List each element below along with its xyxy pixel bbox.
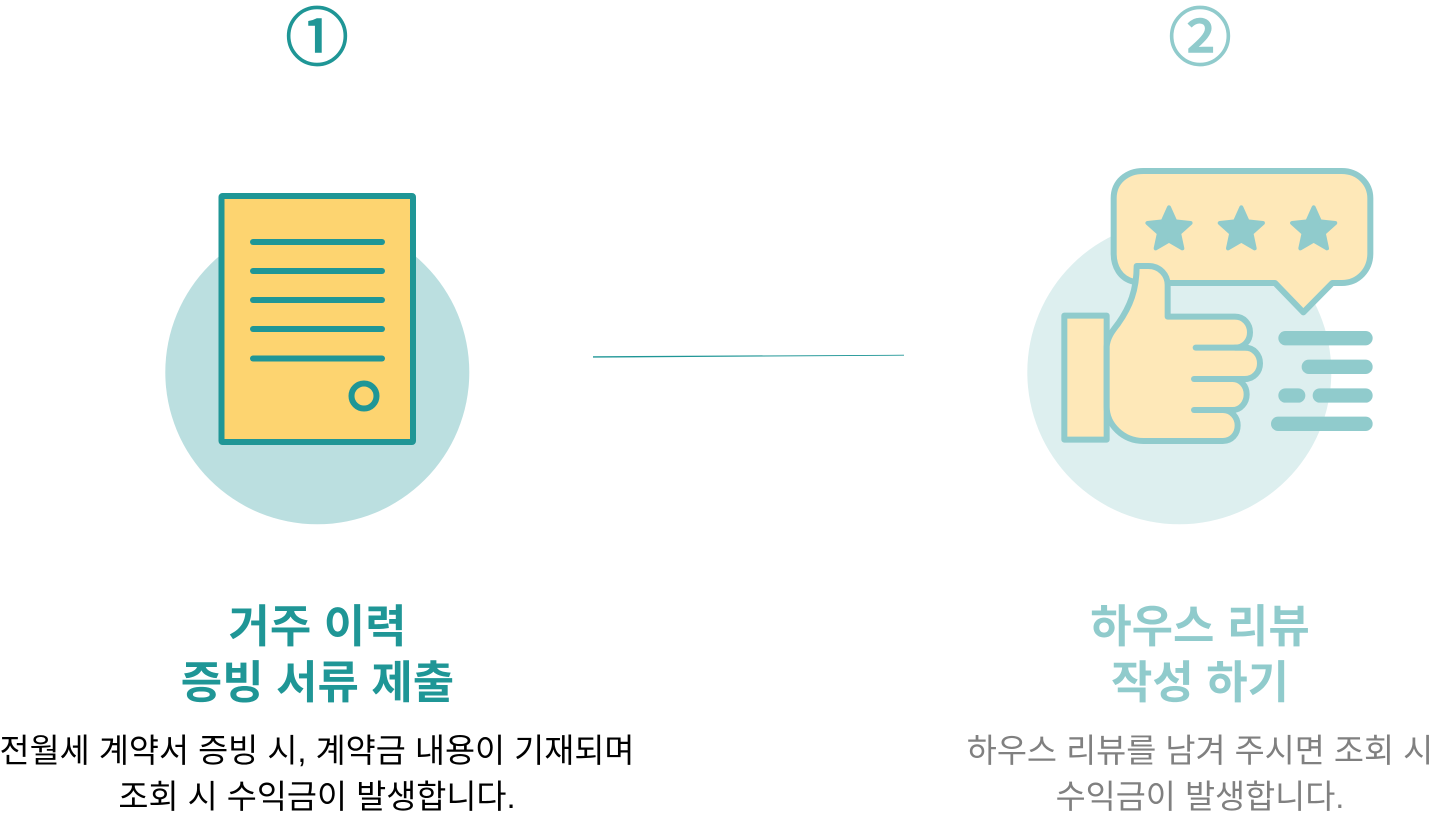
sleeve	[1064, 316, 1107, 440]
description: step 2: 하우스 리뷰를 남겨 주시면 조회 시	[967, 732, 1433, 768]
background circle: review	[1027, 220, 1331, 524]
heading: step 1: 거주 이력	[228, 601, 407, 652]
description: step 1: 조회 시 수익금이 발생합니다.	[118, 778, 516, 814]
hand	[1107, 266, 1260, 441]
heading: step 2: 하우스 리뷰	[1090, 601, 1310, 652]
heading: step 2	[1090, 601, 1310, 708]
connector line	[593, 355, 904, 358]
heading: step 2: 작성 하기	[1111, 657, 1289, 708]
description: step 2	[967, 732, 1433, 814]
description: step 1	[0, 732, 634, 814]
heading: step 1: 증빙 서류 제출	[181, 657, 454, 708]
stars	[1147, 207, 1335, 248]
description: step 1: 전월세 계약서 증빙 시, 계약금 내용이 기재되며	[0, 732, 634, 768]
step number 2: ②	[1168, 4, 1232, 74]
step number 1: ①	[286, 4, 348, 74]
rating bars	[1271, 331, 1373, 431]
icon: thumbs up review	[1064, 171, 1373, 441]
speech bubble	[1114, 171, 1370, 312]
description: step 2: 수익금이 발생합니다.	[1056, 778, 1344, 814]
finger lines	[1194, 348, 1247, 410]
icon: document	[222, 196, 413, 442]
background circle: document	[165, 220, 469, 524]
heading: step 1	[181, 601, 454, 708]
